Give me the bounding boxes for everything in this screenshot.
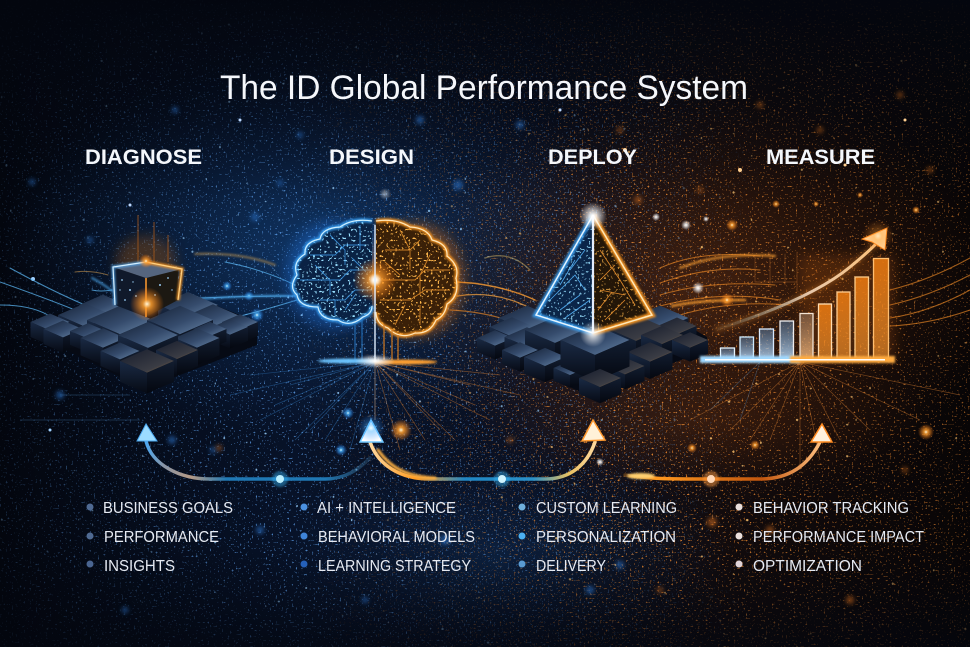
list: diagnose <box>86 500 233 575</box>
bokeh stars <box>29 92 934 613</box>
list: deploy <box>518 500 677 575</box>
list: design <box>300 500 475 575</box>
list: measure: OPTIMIZATION <box>753 558 862 575</box>
list: deploy: CUSTOM LEARNING <box>536 500 677 517</box>
list: design: AI + INTELLIGENCE <box>317 500 456 517</box>
heading: diagnose: DIAGNOSE <box>85 146 202 169</box>
rising arrow <box>715 220 894 330</box>
list: measure: PERFORMANCE IMPACT <box>753 529 924 546</box>
list: diagnose: INSIGHTS <box>104 558 175 575</box>
brain: right orange hemisphere <box>374 215 464 340</box>
brain: stem beam and floor glow <box>318 225 437 420</box>
title: The ID Global Performance System <box>220 69 748 107</box>
list: deploy: PERSONALIZATION <box>536 529 676 546</box>
bars <box>720 255 895 360</box>
list: diagnose: BUSINESS GOALS <box>103 500 233 517</box>
heading: measure: MEASURE <box>766 146 875 169</box>
list: design: LEARNING STRATEGY <box>318 558 471 575</box>
brain: left blue hemisphere <box>290 215 375 330</box>
column headings <box>85 146 875 169</box>
icon: circuit brain <box>285 215 465 420</box>
connector: design to deploy <box>357 414 605 487</box>
process connector arrows <box>137 414 832 487</box>
bar chart with rising arrow <box>700 220 895 363</box>
floor light rays <box>20 362 960 470</box>
icon: glowing pyramid on blocks <box>477 202 708 403</box>
connector: deploy to measure <box>625 424 832 487</box>
list: diagnose: PERFORMANCE <box>104 529 219 546</box>
heading: deploy: DEPLOY <box>548 146 637 169</box>
list: measure <box>736 500 924 575</box>
heading: design: DESIGN <box>329 146 414 169</box>
list: measure: BEHAVIOR TRACKING <box>753 500 909 517</box>
flow lines <box>0 252 970 326</box>
baseline glow <box>700 356 895 363</box>
list: design: BEHAVIORAL MODELS <box>318 529 475 546</box>
icon: glowing cube on blocks <box>30 188 258 393</box>
list: deploy: DELIVERY <box>536 558 606 575</box>
connector: diagnose to design <box>137 424 370 487</box>
